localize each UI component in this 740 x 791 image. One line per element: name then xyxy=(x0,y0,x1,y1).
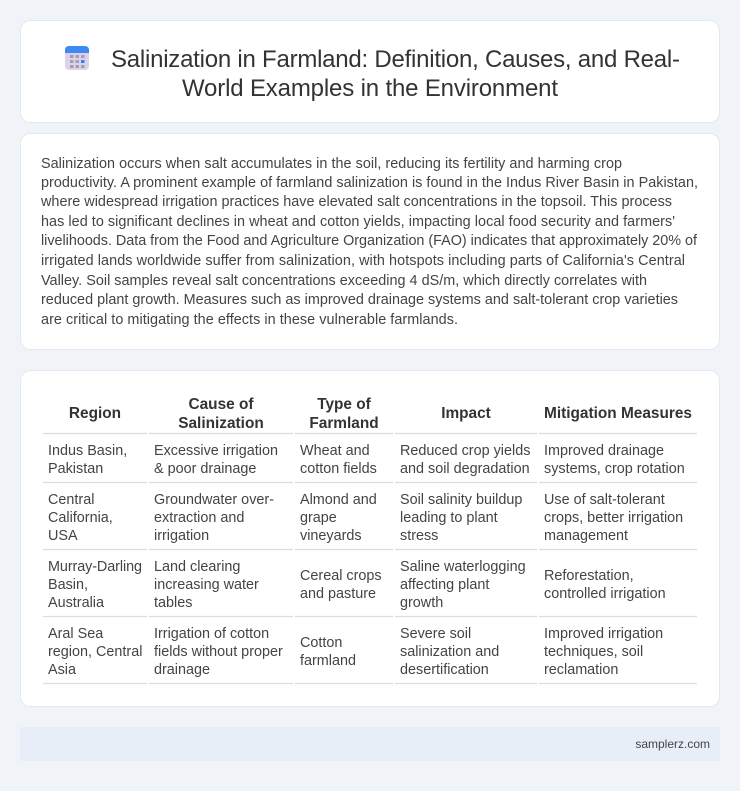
text block: salinization description: irrigated lands worldwide suffer from salinization, with hotspots including parts of California's Central xyxy=(41,253,685,269)
table row: Indus Basin xyxy=(48,443,685,477)
table row: Indus Basin: systems, crop rotation xyxy=(544,461,685,477)
title xyxy=(111,46,680,102)
text block: salinization description: reduced plant growth. Measures such as improved drainage systems and salt-tolerant crop varieties xyxy=(41,292,678,308)
text block: salinization description: Salinization occurs when salt accumulates in the soil, reducing its fertility and harming crop xyxy=(41,156,622,172)
table row: Indus Basin: Indus Basin, xyxy=(48,443,127,459)
text block: salinization description: has led to significant declines in wheat and cotton yields, impacting local food security and farmers' xyxy=(41,214,675,230)
table row: Murray-Darling: and pasture xyxy=(300,586,376,602)
table row: Murray-Darling xyxy=(48,559,666,611)
table row: Murray-Darling: Reforestation, xyxy=(544,568,634,584)
table row: Murray-Darling: Saline waterlogging xyxy=(400,559,526,575)
table row: Murray-Darling: Australia xyxy=(48,595,104,611)
table row: Murray-Darling: affecting plant xyxy=(400,577,489,593)
footer xyxy=(20,727,720,761)
table row: Indus Basin: & poor drainage xyxy=(154,461,256,477)
table row: Murray-Darling: increasing water xyxy=(154,577,259,593)
table header: Type of xyxy=(317,396,372,413)
table header: Salinization xyxy=(178,415,264,432)
table row: Indus Basin: Excessive irrigation xyxy=(154,443,278,459)
table row: Murray-Darling: Basin, xyxy=(48,577,88,593)
table row: Central California: Soil salinity buildup xyxy=(400,492,522,508)
table header xyxy=(69,396,692,432)
table row: Aral Sea: techniques, soil xyxy=(544,644,643,660)
table row: Central California: Use of salt-tolerant xyxy=(544,492,665,508)
table row: Central California: vineyards xyxy=(300,528,362,544)
table header: Mitigation Measures xyxy=(544,405,692,422)
table row: Indus Basin: cotton fields xyxy=(300,461,377,477)
table row: Central California: grape xyxy=(300,510,337,526)
text block: salinization description: Valley. Soil samples reveal salt concentrations exceeding 4 dS/m, which directly correlates with xyxy=(41,273,647,289)
table row: Central California: Central xyxy=(48,492,94,508)
table row: Murray-Darling: growth xyxy=(400,595,443,611)
table row: Murray-Darling: Murray-Darling xyxy=(48,559,142,575)
panel: table xyxy=(20,370,720,706)
title: World Examples in the Environment xyxy=(182,75,558,102)
table row: Aral Sea: Aral Sea xyxy=(48,626,103,642)
table row: Aral Sea: desertification xyxy=(400,662,489,678)
table row: Aral Sea xyxy=(48,626,663,678)
table row: Indus Basin: Pakistan xyxy=(48,461,103,477)
table row: Aral Sea: fields without proper xyxy=(154,644,283,660)
table row: Central California: crops, better irrigation xyxy=(544,510,683,526)
icon: calendar xyxy=(65,46,89,70)
panel: title card xyxy=(20,20,720,122)
text block: salinization description: where widespread irrigation practices have elevated salt concentrations in the topsoil. This process xyxy=(40,194,672,210)
text block: salinization description: productivity. A prominent example of farmland salinization is found in the Indus River Basin in Pakistan, xyxy=(41,175,698,191)
table row: Indus Basin: and soil degradation xyxy=(400,461,530,477)
table row: Murray-Darling: tables xyxy=(154,595,192,611)
table row: Central California: management xyxy=(544,528,628,544)
table row: Aral Sea: region, Central xyxy=(48,644,142,660)
table row: Indus Basin: Wheat and xyxy=(300,443,370,459)
table row: Central California: California, xyxy=(48,510,113,526)
table row: Aral Sea: Irrigation of cotton xyxy=(154,626,269,642)
table header: Impact xyxy=(441,405,491,422)
table row: Indus Basin: Improved drainage xyxy=(544,443,664,459)
table row: Central California: Groundwater over- xyxy=(154,492,274,508)
panel: description xyxy=(20,134,720,350)
table row: Central California: irrigation xyxy=(154,528,209,544)
text block: salinization description: livelihoods. Data from the Food and Agriculture Organization (FAO) indicates that approximately 20% of xyxy=(41,233,698,249)
table row: Central California: Almond and xyxy=(300,492,377,508)
table row: Aral Sea: farmland xyxy=(300,653,356,669)
table row: Aral Sea: drainage xyxy=(154,662,210,678)
table row: Aral Sea: salinization and xyxy=(400,644,499,660)
text block: salinization description xyxy=(40,156,698,328)
table row: Aral Sea: Improved irrigation xyxy=(544,626,663,642)
table row: Central California: extraction and xyxy=(154,510,244,526)
table row: Central California: USA xyxy=(48,528,78,544)
text block: salinization description: are critical to mitigating the effects in these vulnerable farmlands. xyxy=(41,312,458,328)
table row: Aral Sea: reclamation xyxy=(544,662,618,678)
table row: Murray-Darling: Cereal crops xyxy=(300,568,382,584)
table row: Central California: stress xyxy=(400,528,438,544)
table row: Central California xyxy=(48,492,683,544)
table row: Aral Sea: Severe soil xyxy=(400,626,471,642)
table row: Murray-Darling: controlled irrigation xyxy=(544,586,666,602)
table row: Aral Sea: Cotton xyxy=(300,635,342,651)
table row: Aral Sea: Asia xyxy=(48,662,76,678)
table row: Murray-Darling: Land clearing xyxy=(154,559,240,575)
table row: Central California: leading to plant xyxy=(400,510,498,526)
table header: Cause of xyxy=(188,396,254,413)
table header: Region xyxy=(69,405,121,422)
footer: samplerz.com xyxy=(635,737,710,751)
table header: Farmland xyxy=(309,415,379,432)
table row: Indus Basin: Reduced crop yields xyxy=(400,443,530,459)
title: Salinization in Farmland: Definition, Causes, and Real- xyxy=(111,46,680,73)
